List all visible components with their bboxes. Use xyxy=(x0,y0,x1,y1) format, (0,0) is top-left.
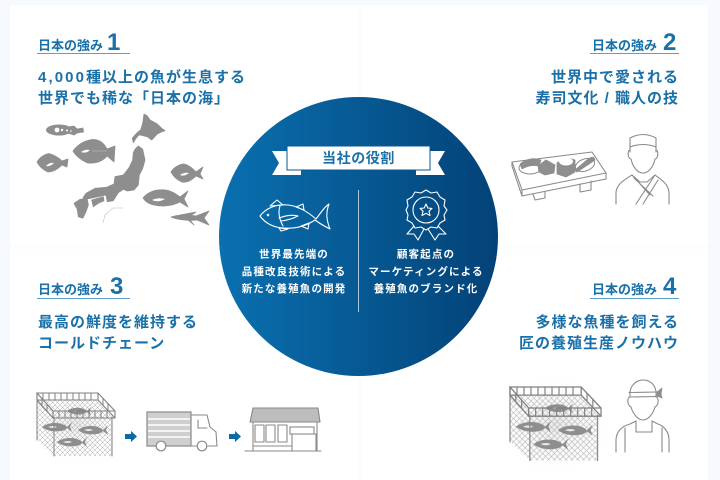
text: breeding technology: 新たな養殖魚の開発 xyxy=(242,282,346,295)
headline: strength 1: 世界でも稀な「日本の海」 xyxy=(38,89,230,107)
icon: sushi board xyxy=(512,152,606,200)
heading: strength 1 xyxy=(37,29,130,56)
arrow: cage to truck xyxy=(125,431,137,442)
icon: net cage with fish xyxy=(495,371,616,478)
headline: strength 1: 種以上の魚が生息する xyxy=(86,68,246,86)
heading: strength 3: 3 xyxy=(110,273,123,300)
icon: tuna xyxy=(143,190,188,207)
heading: strength 1: 1 xyxy=(107,29,120,56)
icon: fish outline xyxy=(260,200,330,231)
headline: strength 4: 匠の養殖生産ノウハウ xyxy=(519,334,679,352)
heading: strength 4: 日本の強み xyxy=(592,282,657,297)
heading: strength 2: 2 xyxy=(663,29,676,56)
headline: strength 2: 世界中で愛される xyxy=(551,69,679,86)
heading: strength 3: 日本の強み xyxy=(38,282,103,297)
icon: net cage xyxy=(24,379,128,471)
panel: strength 3 xyxy=(24,273,321,471)
arrow: truck to store xyxy=(229,431,241,442)
headline: strength 3: コールドチェーン xyxy=(38,335,165,352)
icon: award medal xyxy=(406,190,447,240)
text: branding: マーケティングによる xyxy=(368,265,484,278)
headline: strength 1: 4,000 xyxy=(38,69,86,86)
divider xyxy=(358,190,359,312)
headline: strength 3: 最高の鮮度を維持する xyxy=(38,313,198,331)
ribbon title: 当社の役割 xyxy=(322,150,395,166)
icon: fish farmer xyxy=(616,380,669,452)
heading: strength 2: 日本の強み xyxy=(592,38,657,53)
icon: flying fish xyxy=(171,211,209,225)
icon: sea bream right xyxy=(171,164,203,182)
text: branding: 顧客起点の xyxy=(397,248,455,260)
text: branding: 養殖魚のブランド化 xyxy=(374,282,478,295)
heading: strength 3 xyxy=(37,273,130,300)
icon: store xyxy=(245,408,321,451)
text: breeding technology: 品種改良技術による xyxy=(242,265,346,278)
headline: strength 2: 寿司文化 / 職人の技 xyxy=(535,89,679,107)
heading: strength 4 xyxy=(590,273,679,300)
panel: strength 4 xyxy=(495,273,679,478)
icon: puffer fish xyxy=(46,124,84,136)
map of Japan xyxy=(74,114,165,223)
icon: sushi chef xyxy=(616,134,669,204)
heading: strength 2 xyxy=(590,29,679,56)
heading: strength 1: 日本の強み xyxy=(38,38,103,53)
headline: strength 4: 多様な魚種を飼える xyxy=(535,313,679,331)
heading: strength 4: 4 xyxy=(663,273,677,300)
text: breeding technology: 世界最先端の xyxy=(259,248,329,260)
icon: truck xyxy=(147,412,217,451)
central circle: role of the company xyxy=(219,97,498,376)
panel: strength 2 xyxy=(512,29,679,204)
icon: sea bream left xyxy=(37,154,68,172)
panel: strength 1 xyxy=(37,29,246,225)
ribbon title xyxy=(272,146,445,175)
icon: flounder xyxy=(73,140,115,163)
